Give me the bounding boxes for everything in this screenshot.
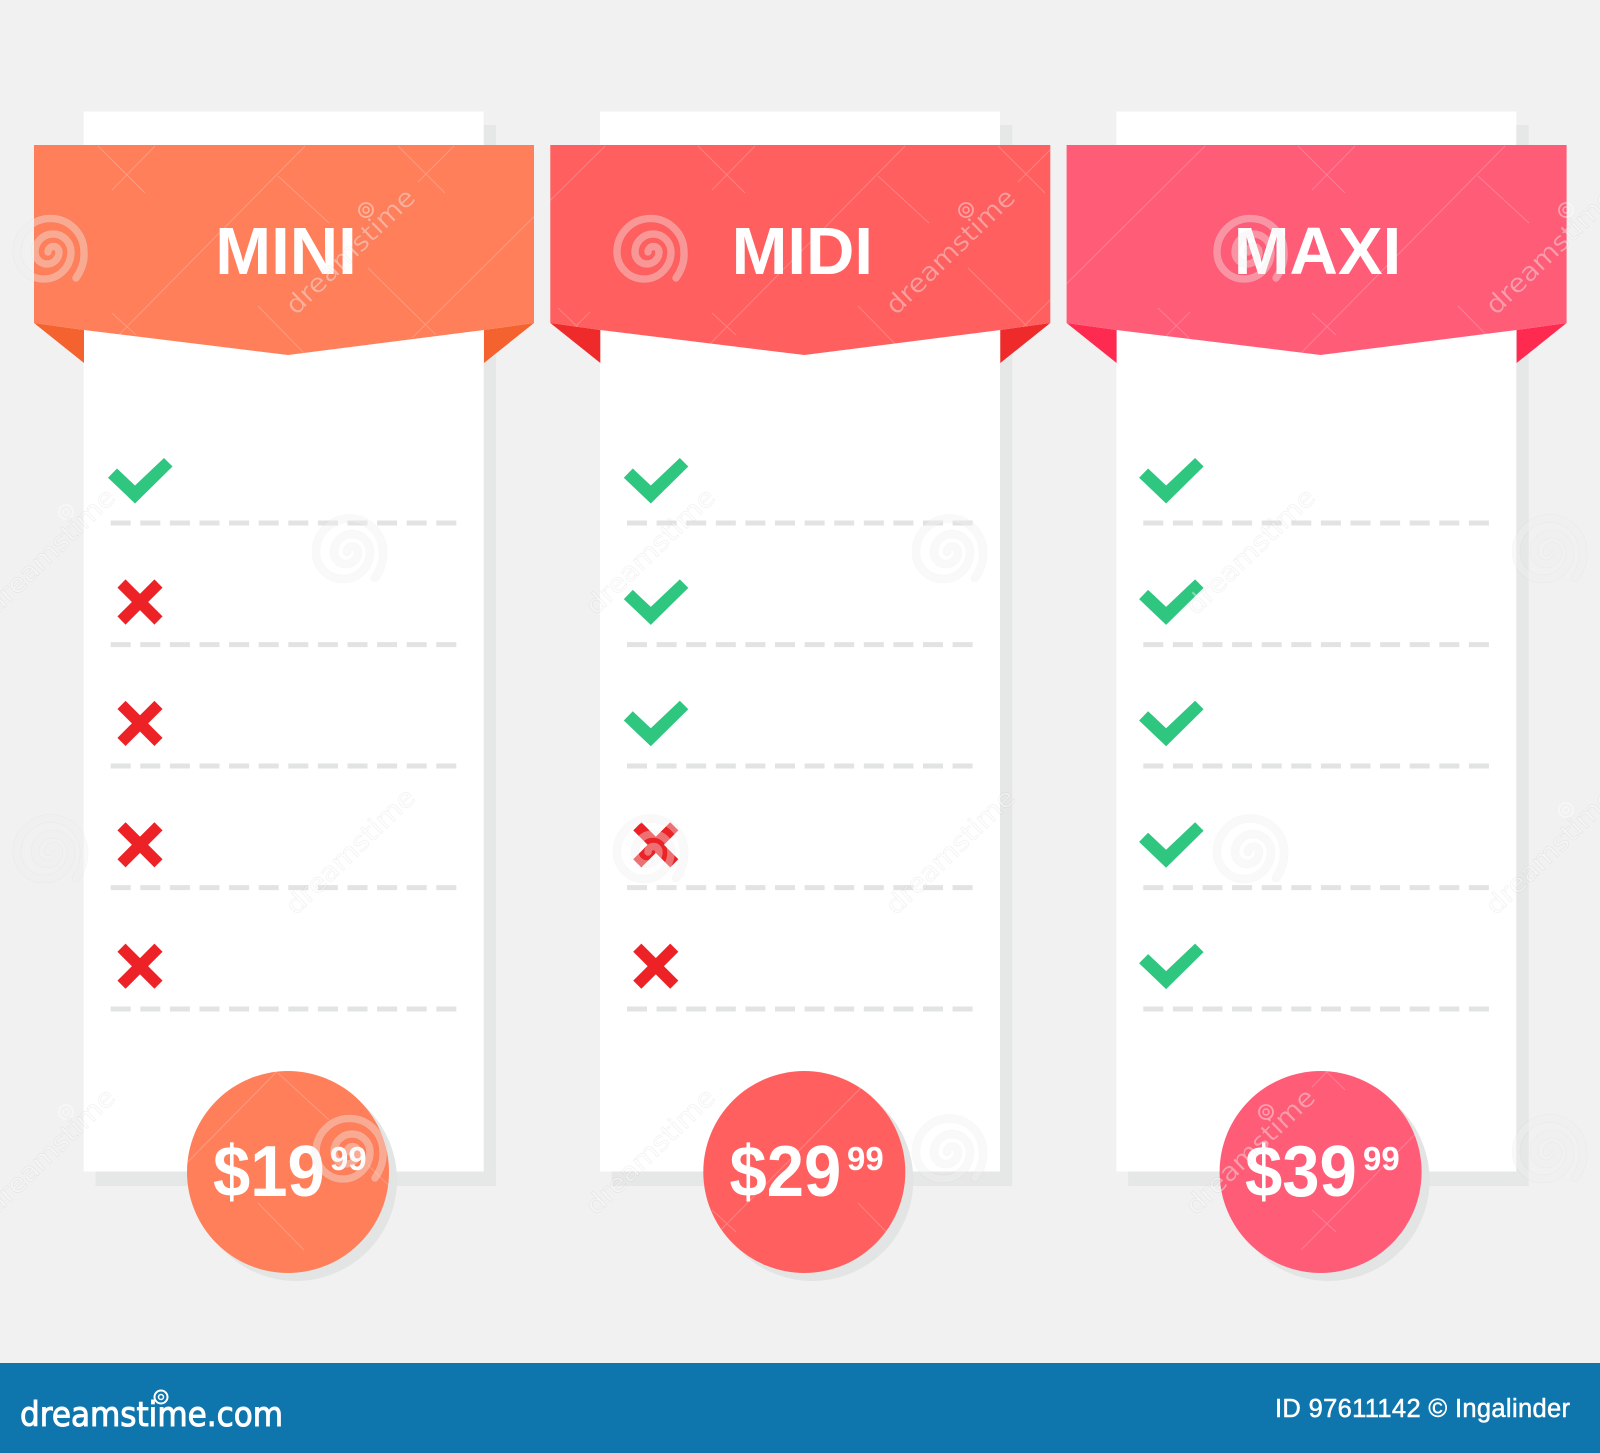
watermark overlay: dreamstime	[280, 783, 422, 921]
price badge: MIDI $29.99: $29	[730, 1131, 841, 1212]
feature rows: MINI	[108, 458, 457, 1009]
panel: MINI plan	[34, 112, 534, 1281]
price badge: MAXI $39.99: 99	[1363, 1140, 1400, 1177]
price badge: MINI $19.99: $19	[213, 1131, 325, 1212]
footer bar	[0, 1363, 1600, 1453]
price badge: MINI $19.99: 99	[330, 1140, 367, 1177]
heading: MIDI: MIDI	[732, 214, 873, 289]
banner: MINI ribbon	[34, 145, 534, 363]
price badge: MIDI $29.99: 99	[847, 1140, 884, 1177]
heading: MINI: MINI	[215, 214, 357, 289]
heading: MAXI: MAXI	[1234, 214, 1401, 289]
watermark overlay: dreamstime	[880, 183, 1022, 321]
price badge: MIDI $29.99	[703, 1071, 913, 1281]
panel: MIDI plan	[550, 112, 1050, 1281]
price badge: MAXI $39.99: $39	[1245, 1131, 1357, 1212]
card: MIDI white sheet with shadow	[600, 112, 1012, 1186]
watermark overlay: dreamstime	[580, 1083, 722, 1221]
icon: check row 3	[624, 701, 688, 746]
price badge: MINI $19.99	[187, 1071, 397, 1281]
card: MAXI white sheet with shadow	[1116, 112, 1529, 1186]
panel: MAXI plan	[1067, 112, 1567, 1281]
icon: check row 1	[108, 458, 172, 504]
watermark overlay: dreamstime	[880, 783, 1022, 921]
watermark overlay: dreamstime	[280, 183, 422, 321]
icon: check row 1	[1139, 458, 1204, 504]
icon: cross row 4	[637, 826, 674, 863]
watermark overlay: dreamstime	[1180, 483, 1322, 621]
watermark overlay	[0, 183, 1600, 1221]
price badge: MAXI $39.99	[1220, 1071, 1430, 1281]
icon: cross row 2	[122, 584, 158, 620]
card: MINI white sheet with shadow	[84, 112, 496, 1186]
feature rows: MAXI	[1139, 458, 1489, 1009]
banner: MIDI ribbon	[550, 145, 1050, 363]
icon: check row 5	[1139, 944, 1204, 989]
footer credit: ID 97611142 © Ingalinder	[1275, 1395, 1570, 1423]
icon: cross row 3	[122, 705, 158, 742]
banner: MAXI ribbon	[1067, 145, 1567, 363]
footer logo: dreamstime.com: dreamstime.com	[20, 1395, 283, 1435]
icon: cross row 4	[122, 826, 158, 863]
icon: cross row 5	[122, 948, 158, 985]
icon: check row 2	[624, 579, 688, 625]
icon: check row 1	[624, 458, 688, 504]
feature rows: MIDI	[624, 458, 973, 1009]
watermark overlay: dreamstime	[580, 483, 722, 621]
icon: check row 3	[1139, 701, 1204, 746]
icon: check row 4	[1139, 822, 1204, 868]
icon: check row 2	[1139, 579, 1204, 625]
icon: cross row 5	[637, 948, 674, 985]
watermark overlay: dreamstime	[1180, 1083, 1322, 1221]
